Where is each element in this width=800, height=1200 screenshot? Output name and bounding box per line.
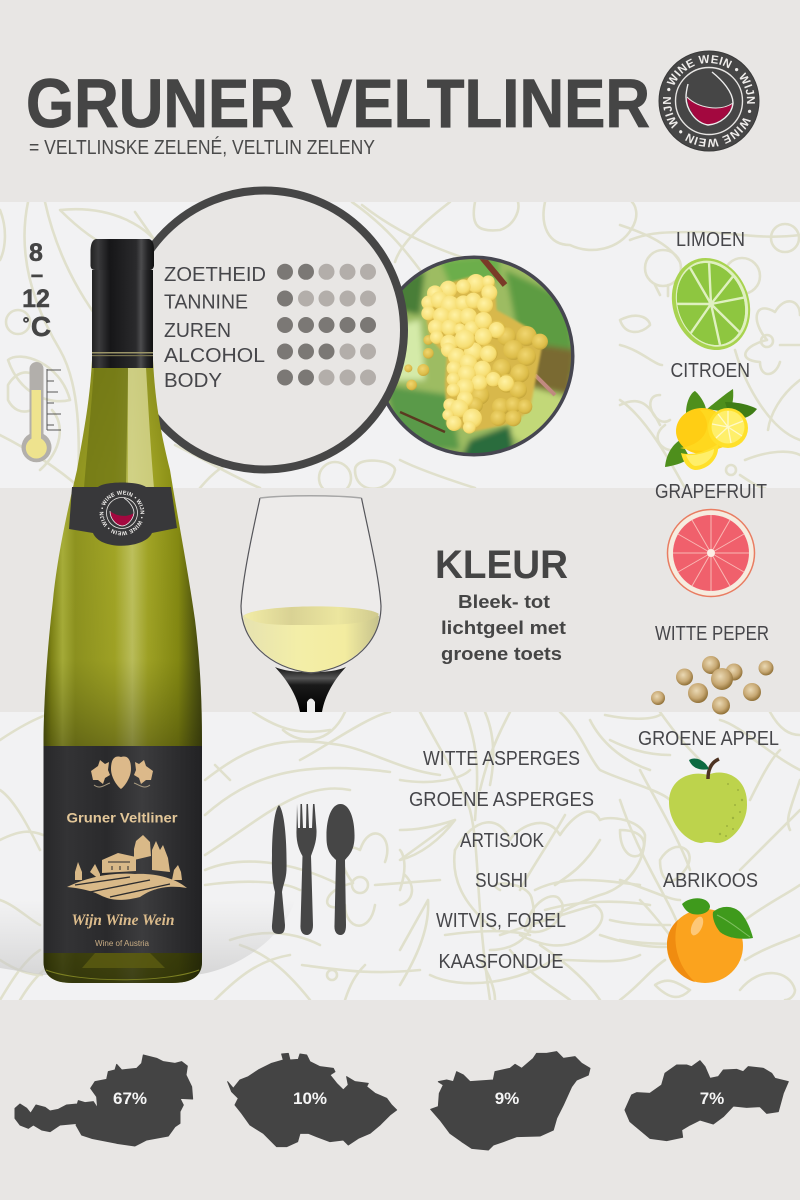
collar mini logo: WINE WEIN • WIJN • WINE WEIN • WIJN •	[100, 490, 144, 536]
icon: grape and vine leaves emblem	[91, 757, 153, 789]
temperature range: 12	[22, 285, 50, 313]
aroma: green apple	[638, 727, 779, 843]
label: CITROEN	[670, 359, 750, 382]
food pairing list: WITTE ASPERGES	[423, 747, 580, 770]
map: Austria 67%	[15, 1055, 193, 1146]
glass body	[44, 360, 202, 983]
icon: vineyard and farmhouse	[67, 835, 187, 900]
color description	[441, 591, 566, 664]
food pairing list: KAASFONDUE	[438, 950, 564, 973]
collar label	[69, 482, 177, 546]
rating dots: tannine	[277, 290, 376, 306]
photo: grape cluster circle	[375, 255, 575, 460]
label: body: BODY	[164, 369, 222, 392]
wine liquid	[243, 607, 379, 673]
icon: round wine logo: WINE WEIN • WIJN • WINE WEIN • WIJN •	[662, 54, 755, 148]
food pairing list: GROENE ASPERGES	[409, 788, 594, 811]
wine bottle	[44, 239, 202, 983]
label: ABRIKOOS	[663, 869, 758, 892]
spoon	[326, 804, 355, 935]
color heading: KLEUR	[435, 543, 568, 587]
color description: lichtgeel met	[441, 617, 566, 638]
front berries	[421, 274, 514, 434]
knife	[272, 805, 287, 934]
icon: thermometer	[22, 362, 61, 462]
temperature range: 8	[29, 239, 43, 267]
panel: lower light band	[0, 712, 800, 1000]
cluster mass	[423, 275, 543, 432]
aroma: apricot	[663, 869, 758, 983]
label: wine name: Gruner Veltliner	[66, 810, 178, 826]
map: Austria 67%: 67%	[113, 1089, 147, 1108]
label: LIMOEN	[676, 228, 745, 251]
aroma: white pepper	[651, 622, 774, 714]
wine glass	[241, 496, 381, 712]
label: brand script: Wijn Wine Wein	[72, 912, 175, 929]
temperature range: °	[23, 314, 30, 333]
icon: apricot	[667, 898, 753, 983]
map: Slovakia 7%: 7%	[700, 1089, 724, 1108]
foliage	[388, 259, 571, 453]
back berries	[404, 321, 548, 426]
map: Hungary 9%: 9%	[495, 1089, 519, 1108]
title: GRUNER VELTLINER	[26, 65, 650, 142]
temperature range	[22, 239, 51, 342]
aroma: lemon	[665, 359, 757, 470]
label: origin: Wine of Austria	[95, 938, 149, 948]
rating dots: zuren	[277, 317, 376, 333]
floral background pattern	[0, 202, 800, 1000]
label: zoetheid: ZOETHEID	[164, 263, 266, 286]
stem base	[275, 667, 346, 712]
icon: knife, fork and spoon	[272, 804, 355, 935]
food pairing list: ARTISJOK	[460, 829, 544, 852]
label: WITTE PEPER	[655, 622, 769, 645]
panel: upper light band	[0, 202, 800, 488]
bottle shadow on the table	[0, 900, 295, 975]
map: Czech Republic 10%	[228, 1053, 397, 1147]
map: Czech Republic 10%: 10%	[293, 1089, 327, 1108]
temperature range: C	[31, 311, 51, 342]
temperature range: –	[31, 262, 43, 287]
aroma: lime	[672, 232, 750, 350]
panel: taste profile circle	[125, 190, 404, 470]
label: zuren: ZUREN	[164, 319, 231, 342]
icon: apple	[669, 758, 747, 843]
subtitle: synonyms: = VELTLINSKE ZELENÉ, VELTLIN ZELENY	[29, 136, 375, 159]
neck highlight	[128, 368, 154, 488]
rating dots: body	[277, 370, 376, 386]
icon: peppercorns	[651, 656, 774, 714]
food pairing list	[409, 747, 594, 973]
fork	[296, 804, 317, 935]
label: tannine: TANNINE	[164, 290, 248, 314]
icon: grapefruit slice	[668, 510, 754, 596]
map: Slovakia 7%	[625, 1061, 788, 1141]
food pairing list: SUSHI	[475, 869, 528, 892]
map: Hungary 9%	[431, 1052, 590, 1150]
wine surface	[244, 606, 379, 625]
bowl fill	[241, 496, 381, 673]
color description: Bleek- tot	[458, 591, 550, 612]
icon: lime slice	[672, 258, 750, 350]
capsule	[92, 270, 153, 368]
main label	[44, 746, 202, 953]
label: alcohol: ALCOHOL	[164, 344, 265, 367]
aroma: grapefruit	[655, 480, 767, 596]
bottle foot	[82, 953, 165, 968]
label: GROENE APPEL	[638, 727, 779, 750]
rating dots: alcohol	[277, 344, 376, 360]
label: GRAPEFRUIT	[655, 480, 767, 503]
icon: lemon with leaves	[665, 389, 757, 470]
color description: groene toets	[441, 643, 562, 664]
rating dots: zoetheid	[277, 264, 376, 280]
glass outline	[241, 498, 381, 673]
food pairing list: WITVIS, FOREL	[436, 909, 566, 932]
